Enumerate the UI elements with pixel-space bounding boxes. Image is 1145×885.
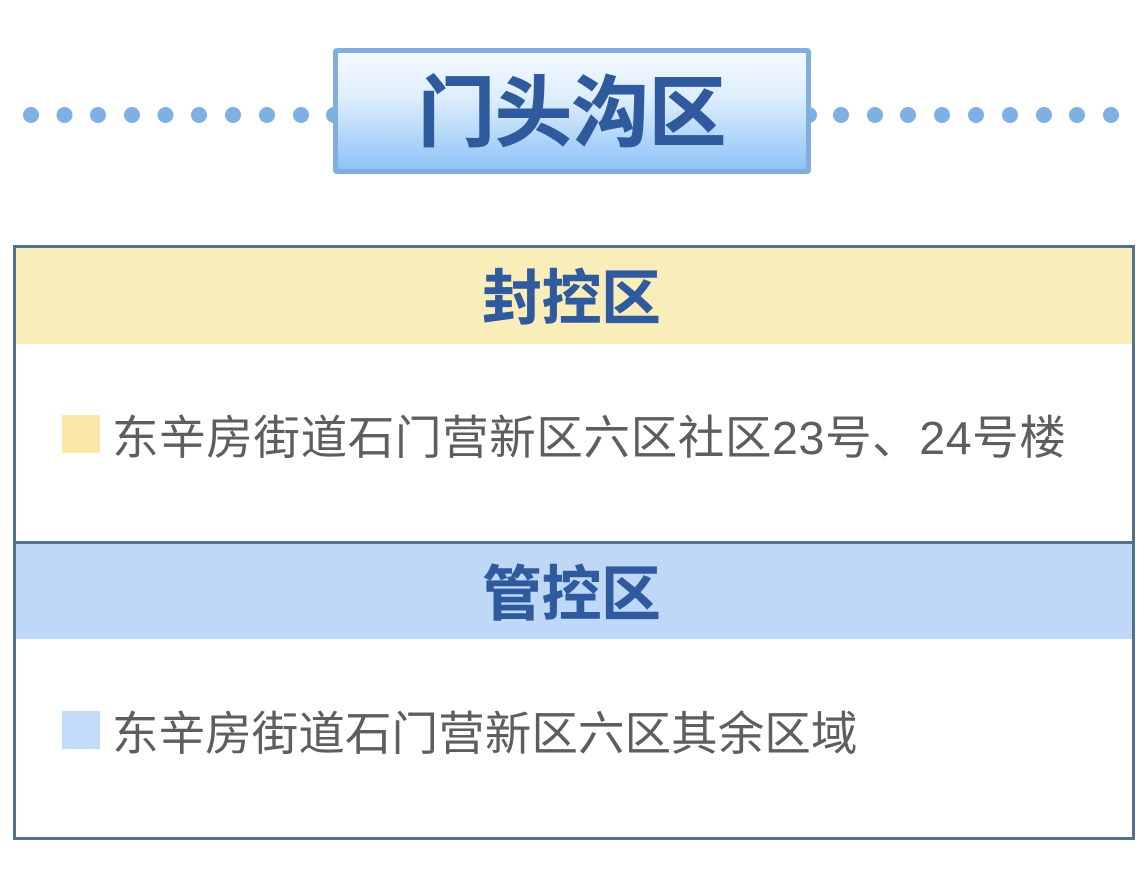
dotted line decoration bbox=[23, 107, 1119, 123]
divider header: sealed zone band bbox=[16, 248, 1132, 344]
heading: 封控区: 封控区 bbox=[482, 265, 661, 332]
legend square: yellow bbox=[62, 415, 100, 453]
divider header: controlled zone band bbox=[16, 541, 1132, 639]
title banner bbox=[333, 48, 811, 174]
text: controlled zone address: 东辛房街道石门营新区六区其余区域 bbox=[112, 708, 858, 760]
text: sealed zone address: 东辛房街道石门营新区六区社区23号、24号楼 bbox=[112, 412, 1066, 464]
heading: 管控区: 管控区 bbox=[482, 561, 661, 628]
legend square: blue bbox=[62, 711, 100, 749]
panel: zones table bbox=[13, 245, 1135, 840]
title: 门头沟区 bbox=[418, 71, 726, 157]
